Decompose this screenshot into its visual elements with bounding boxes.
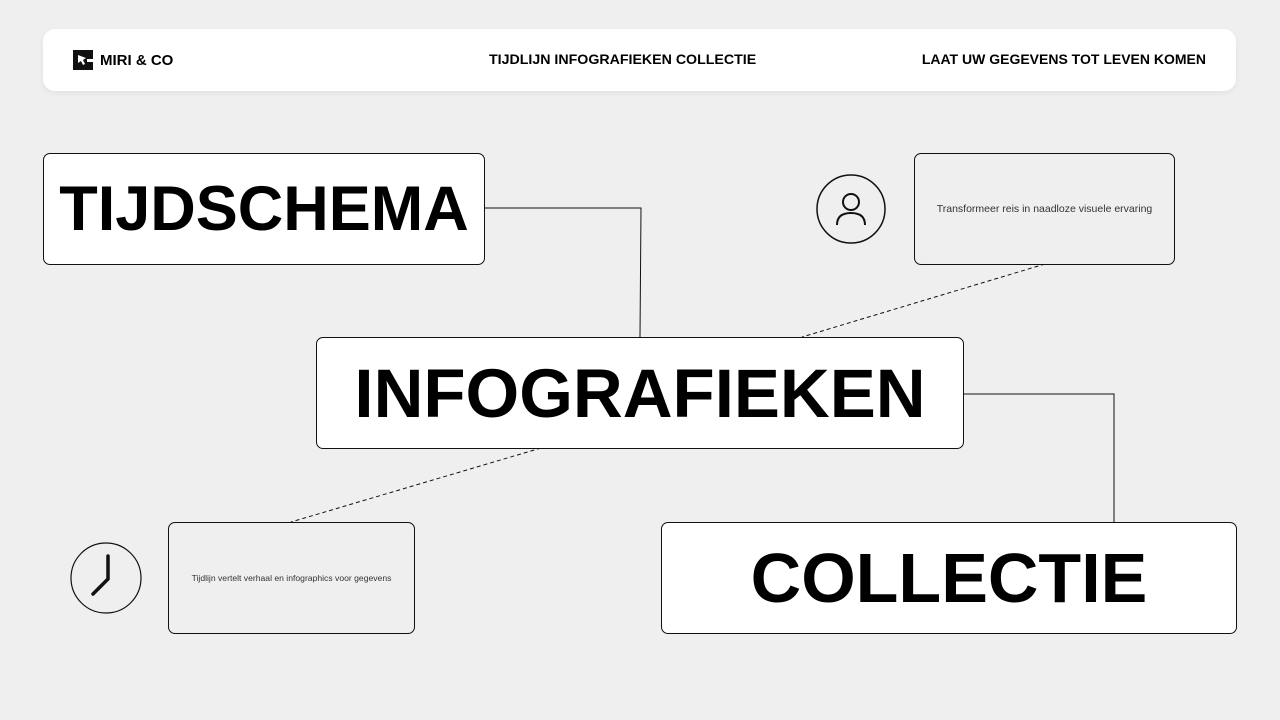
header tagline: LAAT UW GEGEVENS TOT LEVEN KOMEN xyxy=(922,51,1206,67)
logo: MIRI & CO xyxy=(100,52,173,68)
box: INFOGRAFIEKEN xyxy=(316,337,964,449)
box: TIJDSCHEMA xyxy=(43,153,485,265)
text box: tijdlijn: Tijdlijn vertelt verhaal en infographics voor gegevens xyxy=(192,573,391,583)
header bar xyxy=(43,29,1236,91)
text box: transformeer: Transformeer reis in naadloze visuele ervaring xyxy=(937,203,1152,215)
icon: person xyxy=(816,174,886,244)
box: TIJDSCHEMA: TIJDSCHEMA xyxy=(59,174,469,244)
box: INFOGRAFIEKEN: INFOGRAFIEKEN xyxy=(354,354,926,432)
box: COLLECTIE: COLLECTIE xyxy=(751,539,1147,617)
logo xyxy=(73,50,173,70)
icon: clock xyxy=(70,542,142,614)
header title: TIJDLIJN INFOGRAFIEKEN COLLECTIE xyxy=(489,52,756,68)
text box: tijdlijn xyxy=(168,522,415,634)
text box: transformeer xyxy=(914,153,1175,265)
box: COLLECTIE xyxy=(661,522,1237,634)
